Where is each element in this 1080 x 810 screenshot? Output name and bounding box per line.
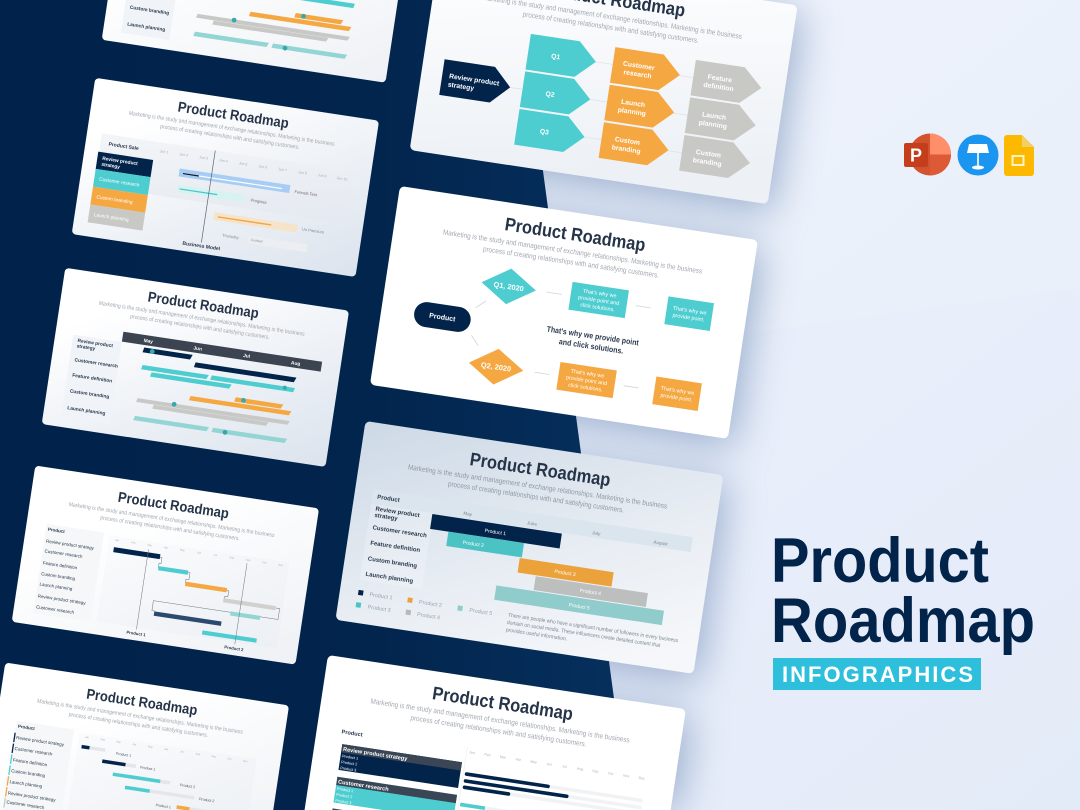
month labels: Oct [227, 756, 232, 761]
task block: customer research: Product 2 [336, 793, 353, 799]
progress bar: teal: Progress [250, 197, 267, 205]
row labels: Customer research [44, 548, 83, 559]
month labels: Sep [211, 754, 217, 759]
month labels: Sep [592, 769, 599, 774]
arrows: gray milestones: branding [692, 157, 722, 168]
arrows: gray milestones: Feature [707, 74, 733, 84]
row labels: Review product strategy [37, 593, 87, 606]
box: teal 1: click solutions. [580, 302, 615, 313]
product tags: Product 1 [155, 803, 171, 809]
main title [771, 526, 1035, 656]
progress bar: teal [177, 185, 267, 206]
month labels: Jun 1 [159, 149, 169, 155]
arrows: quarters [514, 34, 599, 155]
product tags: Product 1 [140, 765, 156, 772]
row labels: Review product [375, 507, 420, 519]
slide subtitle: process of creating relationships with and satisfying customers. [410, 713, 587, 749]
slide subtitle: Marketing is the study and management of exchange relationships. Marketing is the business [442, 228, 703, 276]
panel: slide top left (partially cropped gantt): Launch planning [127, 22, 166, 33]
month labels: Apr [515, 757, 522, 762]
month labels: Jun 9 [318, 173, 327, 178]
row labels: Custom branding [367, 556, 418, 570]
bar: Product 3 [518, 558, 614, 587]
legend: Product 1 [369, 592, 393, 601]
panel: slide right 2 (flow chart) [370, 186, 758, 439]
row labels with color ticks: Customer research [6, 799, 45, 810]
progress bars: navy [463, 772, 643, 810]
gantt bars [132, 347, 298, 443]
diamond: Q1 2020: Q1, 2020 [493, 280, 524, 293]
row labels [360, 494, 435, 589]
month labels: Aug [229, 555, 235, 560]
product label: Product [341, 729, 363, 739]
month labels: May [530, 759, 538, 764]
box: orange 2: That's why we [660, 386, 695, 397]
month header: Jul [243, 353, 250, 360]
month labels: Feb [484, 753, 491, 757]
milestone line [182, 148, 235, 252]
icon: PowerPoint [904, 134, 951, 176]
month labels: Jun 5 [238, 161, 248, 167]
arrows: orange milestones: branding [611, 144, 641, 156]
bar: Product 1 [430, 514, 562, 548]
row labels with color ticks [3, 721, 74, 810]
row labels: Feature definition [370, 541, 421, 554]
row labels: Launch planning [67, 405, 106, 417]
month labels: Jan [115, 538, 120, 542]
row labels [61, 335, 122, 424]
row labels: Feature definition [72, 373, 113, 385]
legend: Product 5 [469, 608, 493, 617]
box: teal 2: That's why we [672, 306, 707, 317]
month labels [159, 149, 348, 182]
progress bar: orange [213, 212, 325, 237]
arrow: review product strategy [439, 59, 513, 105]
month labels: May [148, 744, 154, 749]
arrows: gray milestones: Custom [695, 149, 721, 160]
milestone dots [139, 349, 290, 443]
month header band: July [592, 530, 601, 536]
row labels: strategy [101, 162, 121, 170]
box: teal 1: That's why we [582, 289, 617, 300]
bar: Product 5 [494, 585, 664, 625]
month labels [469, 750, 645, 781]
progress tracks [75, 745, 215, 810]
row labels: Feature definition [42, 560, 78, 570]
main title: Product [771, 526, 989, 596]
arrows: orange milestones: Custom [614, 136, 640, 147]
row labels: Product Sale [108, 142, 139, 152]
slide subtitle: Marketing is the study and management of exchange relationships. Marketing is the business [37, 699, 243, 736]
arrows: quarters: Q2 [545, 91, 555, 99]
legend: Product 2 [419, 600, 442, 609]
badge: infographics: INFOGRAPHICS [782, 662, 973, 687]
month labels: Jun 4 [219, 158, 228, 164]
month labels: Jun [546, 762, 552, 767]
month labels: Jun [164, 747, 169, 751]
box: orange 2: provide point. [660, 393, 693, 404]
box: teal 1 [568, 282, 629, 318]
row labels with color ticks: Customer research [14, 746, 53, 757]
slide title: Product Roadmap [117, 490, 230, 522]
arrows: orange milestones [599, 47, 683, 168]
row labels: Product [48, 527, 66, 534]
month header band: June [527, 520, 538, 527]
month labels: Mar [116, 740, 121, 744]
month labels: Jun 10 [336, 176, 348, 182]
month header: Jun [193, 345, 202, 353]
slide title: Product Roadmap [503, 213, 647, 255]
slide subtitle: process of creating relationships with and satisfying customers. [100, 515, 240, 542]
dependency connectors [152, 557, 285, 629]
row labels: Custom branding [41, 571, 76, 581]
arrow: review product strategy: Review product [449, 73, 500, 88]
timeline panel [94, 133, 354, 224]
month labels: Jul [562, 764, 567, 769]
icon: Google Slides [1004, 135, 1034, 176]
row labels [33, 524, 104, 622]
task block: review product strategy: Product 1 [342, 754, 358, 761]
box: orange 1 [556, 362, 617, 398]
progress bar: gray: Thursday [222, 233, 239, 240]
panel: slide left 2 (swimlane gantt) [42, 268, 349, 467]
month labels: Jan [85, 735, 90, 739]
milestone: Product 2: Product 2 [224, 644, 244, 652]
panel: slide top left (partially cropped gantt): Custom branding [129, 5, 170, 17]
row labels [88, 140, 155, 231]
task block: customer research: Customer research [338, 779, 389, 793]
month header band: August [653, 539, 669, 547]
task block: header strip [332, 808, 343, 810]
center statement [545, 325, 640, 358]
task block: review product strategy: Product 3 [340, 766, 357, 773]
panel: slide right 1 (arrow tree) [410, 0, 798, 204]
box: orange 1: click solutions. [568, 382, 603, 394]
bar: Product 5: Product 5 [568, 602, 590, 612]
row labels: strategy [374, 513, 399, 522]
arrows: orange milestones: Launch [621, 99, 646, 109]
row labels: strategy [76, 343, 96, 352]
month labels: Jun 6 [258, 164, 268, 169]
month labels: Aug [577, 767, 583, 771]
box: teal 2: provide point. [672, 313, 705, 324]
diamond: Q2 2020 [466, 345, 526, 389]
slide subtitle: process of creating relationships with and satisfying customers. [447, 479, 625, 515]
panel: slide right 4 (task table, cropped at frame bottom) [305, 655, 686, 810]
box: teal 1: provide point and [578, 295, 619, 307]
arrows: quarters: Q1 [551, 53, 561, 62]
center statement: and click solutions. [558, 337, 624, 356]
row labels: Customer research [36, 604, 75, 615]
bar: Product 4 [534, 576, 648, 607]
timeline panel [97, 535, 290, 649]
row labels with color ticks: Review product strategy [7, 790, 57, 803]
task block: review product strategy [338, 744, 462, 788]
month labels: Nov [623, 774, 630, 778]
task block: review product strategy: Product 2 [341, 760, 358, 767]
month labels: Jun [197, 550, 202, 555]
box: teal 2 [664, 296, 714, 331]
month labels: Dec [638, 776, 645, 781]
progress bar: gray [222, 232, 308, 252]
timeline panel [68, 732, 257, 810]
progress bars: teal [460, 803, 509, 810]
row labels: Review product strategy [46, 538, 95, 551]
row labels with color ticks: Custom branding [11, 768, 46, 778]
progress bar: gray: Cooked [251, 238, 263, 244]
arrow: review product strategy: strategy [447, 82, 475, 92]
row labels: Launch planning [39, 582, 73, 591]
month labels: Feb [100, 737, 106, 742]
row labels with color ticks: Launch planning [9, 779, 43, 789]
main title: Roadmap [771, 586, 1035, 656]
product tags [109, 752, 219, 810]
bar: Product 1: Product 1 [484, 528, 507, 537]
slide subtitle: process of creating relationships with and satisfying customers. [130, 314, 270, 341]
month labels: Jul [180, 749, 184, 754]
panel: slide top left (partially cropped gantt) [102, 0, 409, 83]
arrows: quarters: Q3 [539, 128, 550, 137]
row labels with color ticks: Review product strategy [16, 735, 65, 747]
panel: slide left 4 (progress tracks, cropped at frame bottom) [0, 662, 289, 810]
row labels: Review product [77, 338, 114, 349]
month header band: May [463, 511, 473, 517]
bar: Product 2 [446, 532, 524, 557]
slide subtitle: process of creating relationships with and satisfying customers. [482, 244, 660, 280]
row labels: Customer research [99, 177, 140, 189]
row labels: Launch planning [93, 212, 129, 223]
slide title: Product Roadmap [85, 687, 198, 719]
month labels: Apr [132, 742, 137, 747]
navy diagonal band [0, 0, 629, 810]
icon: PowerPoint: P [910, 146, 922, 166]
progress bar: blue: Funnels Test [294, 189, 318, 197]
month labels: Jun 8 [298, 170, 307, 175]
month labels: Sep [245, 558, 251, 562]
month labels: Oct [608, 771, 614, 776]
milestone: Product 1: Product 1 [126, 630, 147, 637]
month labels: Nov [243, 759, 249, 763]
month labels: Mar [147, 543, 152, 547]
slide subtitle: Marketing is the study and management of exchange relationships. Marketing is the business [407, 462, 668, 511]
month header: Aug [290, 360, 301, 367]
month labels: Jun 7 [278, 167, 287, 172]
milestone: Product 2 [224, 562, 257, 652]
diamond: Q2 2020: Q2, 2020 [480, 360, 512, 374]
legend: Product 4 [417, 612, 440, 621]
arrows: gray milestones [679, 60, 764, 181]
bar: Product 3: Product 3 [554, 569, 576, 578]
row labels with color ticks: Product [18, 724, 36, 731]
box: orange 2 [652, 376, 702, 411]
month labels: Apr [164, 545, 168, 550]
row labels: Customer research [372, 525, 427, 539]
row labels: Review product [102, 156, 138, 167]
legend: Product 3 [367, 604, 391, 614]
bar: Product 2: Product 2 [462, 540, 484, 549]
row labels: Launch planning [365, 572, 414, 585]
slide subtitle: Marketing is the study and management of exchange relationships. Marketing is the business [98, 301, 305, 338]
month labels: Jul [214, 553, 218, 557]
center statement: That's why we provide point [546, 325, 640, 347]
legend [355, 590, 493, 629]
row labels: Customer research [74, 357, 118, 370]
month labels [85, 735, 249, 763]
note paragraph: There are people who have a significant number of followers in every business [508, 613, 679, 644]
row labels: Product [377, 495, 400, 504]
month labels: Jun 3 [199, 155, 208, 161]
row labels: Custom branding [69, 388, 110, 400]
progress bar: blue [178, 168, 319, 197]
task block: customer research: Product 3 [335, 799, 352, 805]
diamond: Q1 2020 [479, 264, 539, 308]
milestone: Product 1 [126, 548, 159, 637]
month labels: Jun 2 [179, 152, 188, 158]
slide subtitle: Marketing is the study and management of exchange relationships. Marketing is the business [370, 696, 631, 745]
arrows: gray milestones: definition [703, 82, 734, 93]
product tags: Product 2 [180, 783, 195, 789]
arrows: orange milestones: research [623, 69, 652, 80]
month header: May [143, 338, 154, 345]
arrows: orange milestones: Customer [623, 61, 655, 72]
arrows: gray milestones: planning [698, 120, 727, 131]
slide subtitle: Marketing is the study and management of exchange relationships. Marketing is the business [68, 502, 275, 539]
arrows: gray milestones: Launch [702, 111, 727, 122]
slide subtitle: process of creating relationships with and satisfying customers. [522, 9, 699, 45]
slide title: Product Roadmap [147, 290, 260, 322]
slide subtitle: process of creating relationships with and satisfying customers. [160, 124, 300, 151]
month labels: Jan [469, 750, 475, 755]
bar: Product 4: Product 4 [579, 588, 602, 597]
box: orange 1: provide point and [566, 375, 607, 387]
task block: review product strategy: Review product strategy [343, 747, 409, 763]
panel: slide right 3 (stacked gantt with legend) [335, 421, 723, 674]
month labels: Feb [131, 540, 136, 545]
task block: customer research: Product 1 [337, 787, 353, 793]
month labels: May [180, 548, 186, 552]
note paragraph [505, 613, 679, 659]
progress bar: orange: Un Premium [302, 226, 325, 235]
card shadows [311, 0, 802, 810]
note paragraph: domain on social media. These influencers create detailed content that [506, 620, 661, 649]
box: orange 1: That's why we [570, 369, 605, 380]
month header [122, 332, 322, 372]
slide subtitle: process of creating relationships with and satisfying customers. [68, 712, 209, 739]
note paragraph: provides useful information. [505, 627, 568, 643]
product pill [412, 300, 472, 334]
slide title: Product Roadmap [177, 100, 290, 132]
month header band [371, 489, 693, 552]
milestone line: Business Model [182, 241, 221, 252]
month labels: Oct [262, 560, 267, 565]
product tags: Product 1 [116, 752, 131, 758]
row labels: Custom branding [96, 194, 133, 206]
panel: slide left 3 (dependency gantt) [12, 466, 319, 665]
product tags: Product 2 [199, 797, 215, 803]
product pill: Product [429, 313, 456, 324]
row labels with color ticks: Feature definition [12, 757, 48, 767]
arrows: orange milestones: planning [617, 107, 646, 118]
gantt bars [103, 547, 281, 645]
task block: customer research [334, 777, 457, 810]
month labels: Nov [278, 562, 284, 567]
panel: slide left 1 (progress roadmap) [72, 78, 379, 277]
month labels: Aug [195, 751, 201, 756]
slide title: Product Roadmap [431, 682, 575, 724]
month labels: Mar [500, 755, 507, 760]
slide subtitle: Marketing is the study and management of exchange relationships. Marketing is the business [128, 111, 335, 148]
slide title: Product Roadmap [468, 448, 612, 490]
icon: Keynote [958, 134, 998, 176]
month labels [115, 538, 284, 567]
